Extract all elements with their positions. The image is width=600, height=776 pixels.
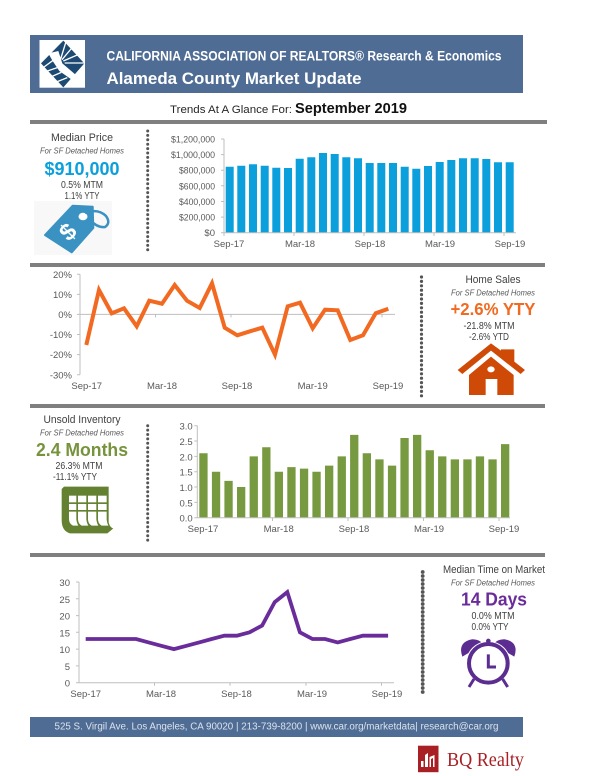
home sales changes: -21.8% MTM [464,321,514,332]
median price changes: 0.5% MTM [61,180,103,191]
chart: median price bars: Mar-18 [285,239,315,250]
home sales value: +2.6% YTY [450,299,536,319]
chart: inventory bars: Mar-18 [264,524,294,535]
chart: home sales line: 20% [53,270,73,281]
chart: inventory bars [179,422,519,535]
icon: calendar [62,487,113,533]
chart: median price bars: $800,000 [179,166,215,177]
footer banner: 525 S. Virgil Ave. Los Angeles, CA 90020 | 213-739-8200 | www.car.org/marketdata| research@car.org [54,722,498,732]
home sales changes [464,321,514,343]
chart: time on market line [59,578,402,700]
chart: median price bars: $200,000 [179,213,215,224]
chart: time on market line: 0 [65,679,70,690]
BQ Realty wordmark: BQ Realty [447,749,524,771]
home sales subheading: For SF Detached Homes [451,288,535,298]
chart: median price bars: $400,000 [179,197,215,208]
panel: median price [34,132,124,255]
divider dots: median price [146,131,149,252]
chart: home sales line: Mar-19 [298,381,328,392]
chart: median price bars: Mar-19 [425,239,455,250]
chart: time on market line: 30 [59,578,70,589]
icon: house [458,343,525,395]
subtitle: Trends At A Glance For: [170,104,292,116]
inventory changes: 26.3% MTM [56,461,102,472]
chart: time on market line: 20 [59,612,70,623]
time on market value: 14 Days [461,590,527,610]
inventory value: 2.4 Months [36,440,128,460]
time on market changes: 0.0% MTM [472,611,514,622]
divider dots: home sales [420,277,423,397]
chart: time on market line: 5 [65,662,70,673]
chart: median price bars: $0 [204,228,215,239]
chart: median price bars [171,134,525,250]
chart: home sales line: 10% [53,290,73,301]
time on market changes: 0.0% YTY [472,622,509,633]
chart: inventory bars: 1.0 [179,483,193,494]
icon: alarm clock [461,639,516,687]
chart: inventory bars: 0.5 [179,498,193,509]
BQ Realty logo [418,746,524,772]
header title line 2: Alameda County Market Update [106,69,362,88]
inventory changes: -11.1% YTY [53,472,97,483]
icon: association logo [40,40,85,88]
time on market subheading: For SF Detached Homes [451,579,535,588]
chart: home sales line: Sep-17 [71,381,102,392]
chart: time on market line: Mar-18 [146,689,176,700]
chart: inventory bars: Sep-18 [339,524,369,535]
header banner [30,35,523,93]
icon: price tag: $ [54,218,83,247]
panel: home sales [450,274,536,395]
median price changes [61,180,103,202]
panel: unsold inventory [36,414,128,533]
home sales heading: Home Sales [466,274,521,286]
chart: time on market line: Sep-17 [70,689,101,700]
chart: inventory bars: 2.5 [179,437,193,448]
chart: median price bars: Sep-19 [495,239,525,250]
footer banner [30,717,523,737]
inventory changes [53,461,102,483]
chart: home sales line: Sep-18 [222,381,252,392]
inventory heading: Unsold Inventory [44,414,121,426]
chart: home sales line: 0% [58,310,73,321]
median price changes: 1.1% YTY [64,191,100,202]
chart: home sales line: Mar-18 [147,381,177,392]
chart: time on market line: Sep-19 [372,689,402,700]
chart: time on market line: 10 [59,645,70,656]
icon: BQ building [418,746,438,772]
chart: home sales line: Sep-19 [373,381,403,392]
chart: inventory bars: 2.0 [179,452,193,463]
divider dots: inventory [146,426,149,542]
chart: median price bars: Sep-18 [355,239,385,250]
median price subheading: For SF Detached Homes [40,146,124,156]
chart: time on market line: 25 [59,595,70,606]
chart: home sales line: -10% [50,330,73,341]
chart: inventory bars: Sep-17 [188,524,218,535]
chart: time on market line: 15 [59,628,70,639]
chart: inventory bars: 3.0 [179,422,193,433]
chart: inventory bars: Sep-19 [489,524,519,535]
chart: time on market line: Sep-18 [221,689,252,700]
chart: home sales line: -30% [50,370,73,382]
chart: inventory bars: 1.5 [179,468,193,479]
chart: time on market line: Mar-19 [297,689,327,700]
chart: median price bars: $1,200,000 [171,134,215,146]
median price heading: Median Price [51,132,113,144]
subtitle: September 2019 [295,100,407,117]
panel: median time on market [443,564,545,687]
median price value: $910,000 [44,158,120,179]
inventory subheading: For SF Detached Homes [40,429,124,438]
chart: median price bars: $600,000 [179,181,215,192]
time on market heading: Median Time on Market [443,564,545,576]
chart: home sales line [50,270,403,392]
divider dots: time on market [421,572,425,696]
subtitle [170,100,407,117]
chart: median price bars: $1,000,000 [171,150,215,161]
header title line 1: CALIFORNIA ASSOCIATION OF REALTORS® Research & Economics [106,48,502,64]
home sales changes: -2.6% YTD [469,332,509,343]
chart: inventory bars: Mar-19 [414,524,444,535]
time on market changes [472,611,514,633]
chart: median price bars: Sep-17 [214,239,244,250]
chart: home sales line: -20% [50,350,73,361]
chart: inventory bars: 0.0 [179,514,193,525]
